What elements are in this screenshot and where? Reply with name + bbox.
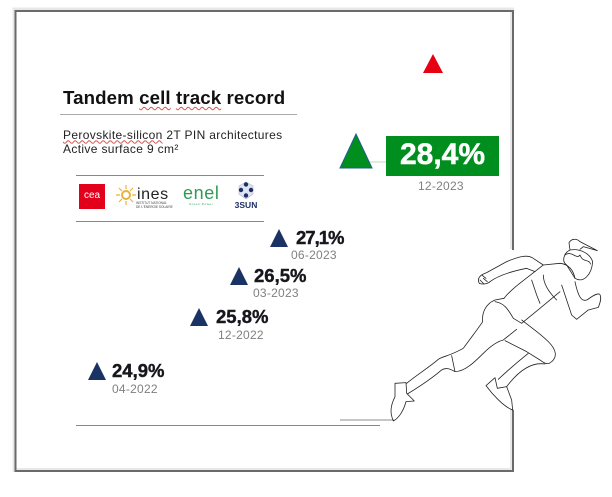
title: Tandem cell track record [63,87,285,108]
date: 12-2023 [418,179,464,193]
logo: enel: enel [183,183,219,203]
marker: 27,1%: 27,1% [296,227,343,248]
marker: 25,8%: 25,8% [216,306,268,327]
logo: cea: cea [84,190,100,201]
marker: 25,8% [190,306,268,342]
marker: 27,1% [270,227,344,262]
logo: ines: DE L'ÉNERGIE SOLAIRE [136,204,173,208]
logo: 3SUN: 3SUN [235,200,257,210]
value box: 28,4% [400,138,485,171]
marker: 24,9%: 04-2022 [112,382,158,396]
marker: 27,1%: 06-2023 [291,248,337,262]
marker: 26,5% [230,265,306,300]
logo: cea [79,184,105,209]
subtitle: Active surface 9 cm² [63,142,179,156]
logo: ines [116,185,173,208]
subtitle: Perovskite-silicon 2T PIN architectures [63,128,283,142]
logo: ines: INSTITUT NATIONAL [136,201,167,205]
logo: ines: ines [137,186,169,203]
marker: 24,9% [88,360,164,396]
logo: 3SUN [234,182,257,210]
subtitle [63,128,283,156]
marker: 25,8%: 12-2022 [218,328,264,342]
logo: enel: Green Power [189,202,213,206]
marker: 26,5%: 03-2023 [253,286,299,300]
marker: 26,5%: 26,5% [254,265,306,286]
value box [386,136,499,176]
logos [79,182,257,210]
icon: runner line drawing [340,238,602,422]
marker: 24,9%: 24,9% [112,360,164,381]
baseline [76,425,380,426]
marker: 28,4% record [339,133,499,193]
marker: red triangle [423,54,443,73]
